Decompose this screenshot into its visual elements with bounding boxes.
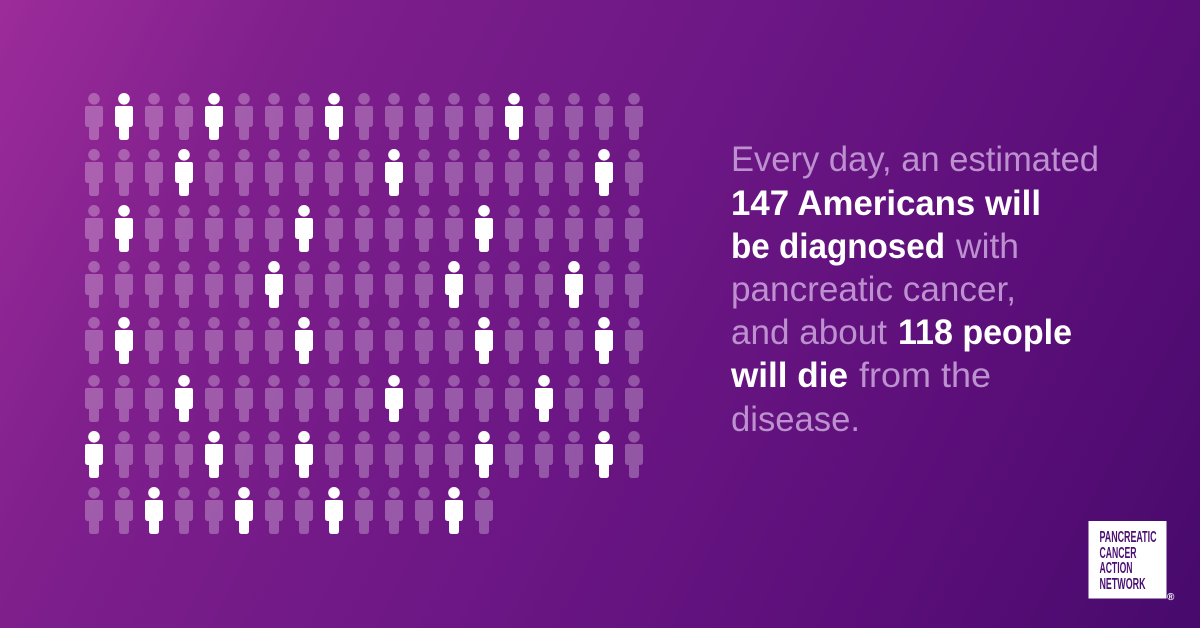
statistic text block: disease. <box>731 400 860 439</box>
statistic text block: from the <box>859 356 991 395</box>
highlighted people <box>85 93 613 534</box>
muted people <box>85 93 643 534</box>
logo: Pancreatic Cancer Action Network: ACTION <box>1100 560 1132 577</box>
pictogram: people grid <box>85 93 643 534</box>
statistic text block: with <box>955 227 1019 266</box>
statistic text block: 118 people <box>898 313 1072 352</box>
logo: Pancreatic Cancer Action Network: NETWORK <box>1100 576 1146 593</box>
statistic text block: 147 Americans will <box>731 184 1041 223</box>
logo: Pancreatic Cancer Action Network: CANCER <box>1100 545 1137 562</box>
statistic text block: Every day, an estimated <box>731 140 1099 179</box>
logo: Pancreatic Cancer Action Network <box>1088 521 1175 603</box>
statistic text block <box>730 140 1099 439</box>
logo: Pancreatic Cancer Action Network: PANCREATIC <box>1100 529 1157 546</box>
statistic text block: be diagnosed <box>731 227 945 266</box>
statistic text block: and about <box>731 313 887 352</box>
statistic text block: will die <box>730 356 848 395</box>
logo: Pancreatic Cancer Action Network: ® <box>1167 592 1175 603</box>
statistic text block: pancreatic cancer, <box>731 270 1016 309</box>
